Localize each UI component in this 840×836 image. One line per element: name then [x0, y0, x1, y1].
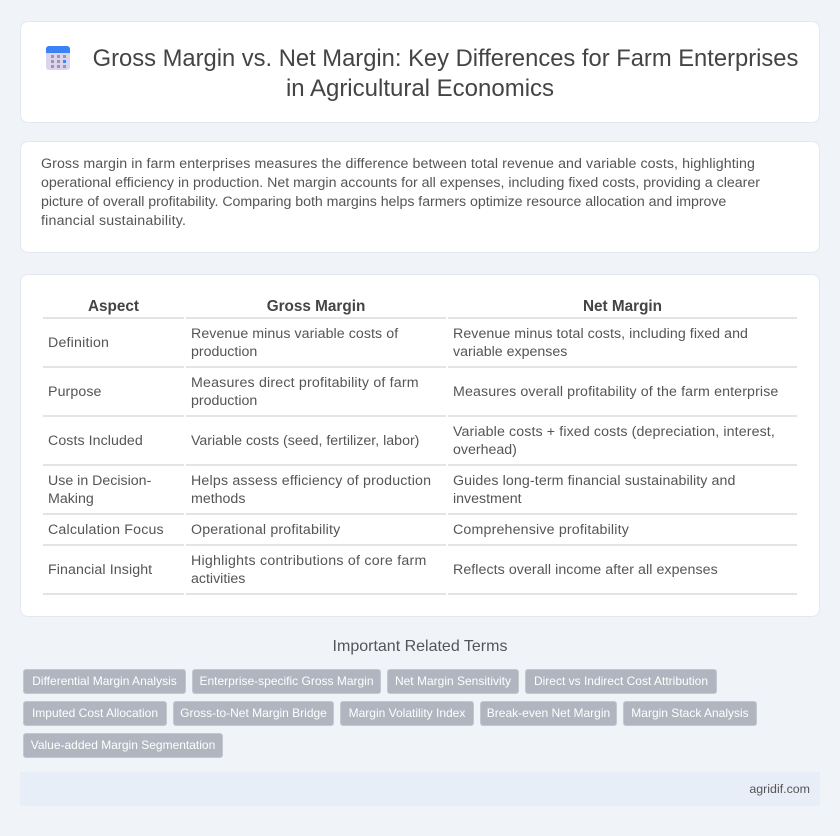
comparison table: Guides long-term financial sustainability and — [453, 473, 736, 489]
tag: Break-even Net Margin — [487, 706, 610, 720]
comparison table: investment — [453, 491, 522, 507]
description text: operational efficiency in production. Net margin accounts for all expenses, including fixed costs, providing a clearer — [41, 175, 760, 191]
comparison table: overhead) — [453, 442, 517, 458]
tag — [387, 669, 519, 694]
description panel — [20, 141, 820, 253]
tag — [23, 669, 186, 694]
tag — [340, 701, 474, 726]
tag: Imputed Cost Allocation — [32, 706, 158, 720]
comparison table: variable expenses — [453, 344, 567, 360]
column heading: net margin: Net Margin — [583, 298, 662, 315]
related terms heading: Important Related Terms — [333, 638, 507, 655]
footer bar — [20, 772, 820, 806]
tag: Value-added Margin Segmentation — [31, 738, 215, 752]
tag: Enterprise-specific Gross Margin — [199, 674, 374, 688]
footer source: agridif.com — [749, 782, 810, 796]
related terms tags — [23, 669, 757, 758]
comparison table: production — [191, 393, 257, 409]
tag — [525, 669, 717, 694]
panel: comparison table — [20, 274, 820, 617]
row: decision-making: Making — [48, 491, 94, 507]
comparison table: Comprehensive profitability — [453, 522, 629, 538]
description text — [41, 156, 760, 229]
description text: picture of overall profitability. Comparing both margins helps farmers optimize resource allocation and improve — [41, 194, 726, 210]
tag: Margin Stack Analysis — [631, 706, 749, 720]
tag: Net Margin Sensitivity — [395, 674, 511, 688]
column heading: aspect: Aspect — [88, 298, 139, 315]
tag — [480, 701, 617, 726]
comparison table: Measures overall profitability of the farm enterprise — [453, 384, 778, 400]
comparison table: Helps assess efficiency of production — [191, 473, 431, 489]
column heading: gross margin: Gross Margin — [267, 298, 365, 315]
comparison table: Variable costs + fixed costs (depreciation, interest, — [453, 424, 775, 440]
row: calculation focus: Calculation Focus — [48, 522, 164, 538]
description text: Gross margin in farm enterprises measures the difference between total revenue and variable costs, highlighting — [41, 156, 755, 172]
comparison table: Operational profitability — [191, 522, 340, 538]
tag: Differential Margin Analysis — [32, 674, 177, 688]
description text: financial sustainability. — [41, 213, 186, 229]
row: financial insight: Financial Insight — [48, 562, 152, 578]
tag — [623, 701, 757, 726]
row: definition: Definition — [48, 335, 109, 351]
comparison table: Variable costs (seed, fertilizer, labor) — [191, 433, 419, 449]
title — [93, 45, 798, 102]
row: decision-making — [48, 473, 151, 507]
tag: Direct vs Indirect Cost Attribution — [534, 674, 708, 688]
header panel — [20, 21, 820, 123]
tag — [23, 733, 223, 758]
title: in Agricultural Economics — [286, 75, 554, 102]
comparison table: Highlights contributions of core farm — [191, 553, 427, 569]
tag — [192, 669, 381, 694]
icon: calendar — [46, 46, 70, 70]
tag: Gross-to-Net Margin Bridge — [180, 706, 327, 720]
comparison table: Measures direct profitability of farm — [191, 375, 419, 391]
tag — [173, 701, 334, 726]
row: purpose: Purpose — [48, 384, 102, 400]
comparison table: Revenue minus variable costs of — [191, 326, 398, 342]
comparison table — [43, 298, 797, 595]
tag: Margin Volatility Index — [349, 706, 465, 720]
row: costs included: Costs Included — [48, 433, 143, 449]
title: Gross Margin vs. Net Margin: Key Differences for Farm Enterprises — [93, 45, 798, 72]
comparison table: methods — [191, 491, 245, 507]
comparison table: Reflects overall income after all expenses — [453, 562, 718, 578]
comparison table: activities — [191, 571, 245, 587]
comparison table: production — [191, 344, 257, 360]
tag — [23, 701, 167, 726]
comparison table: Revenue minus total costs, including fixed and — [453, 326, 748, 342]
row: decision-making: Use in Decision- — [48, 473, 151, 489]
